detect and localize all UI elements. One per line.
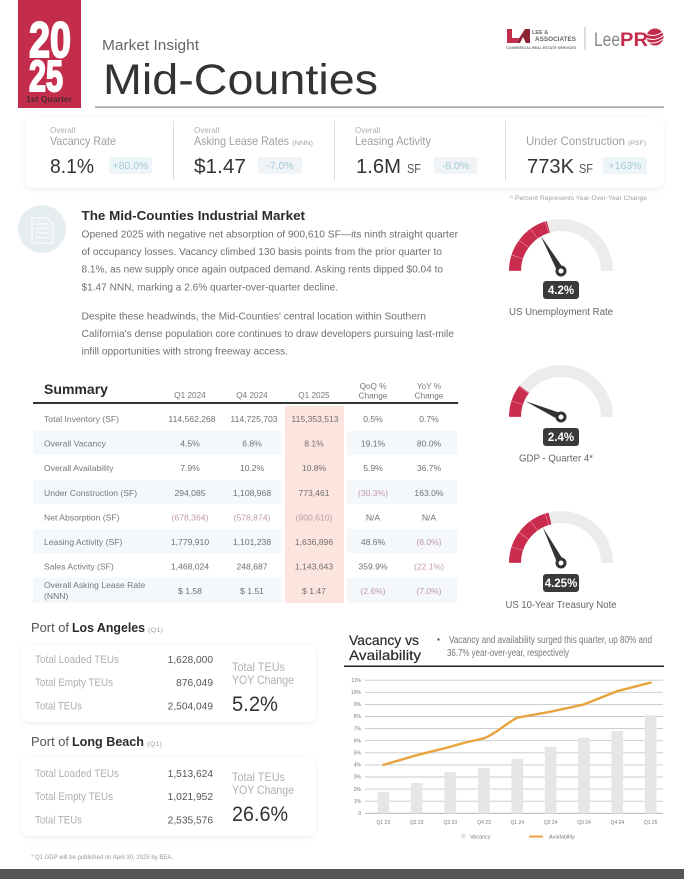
logo: Lee and Associates / LeePRO: PR [620,30,648,51]
KPI: asking lease rates [194,126,313,178]
gauge: GDP quarter 4: 2.4% [548,432,574,444]
panel: Port of Los Angeles: 876,049 [176,678,213,689]
KPI: under construction: 773K [527,156,575,178]
panel: Port of Long Beach: 26.6% [232,803,288,826]
panel: Port of Long Beach: 1,021,952 [168,792,213,803]
row: net absorption: (900,610) [296,512,333,522]
row: total inventory: 0.5% [363,414,383,424]
market narrative text: Opened 2025 with negative net absorption of 900,610 SF—its ninth straight quarter [82,229,459,240]
title block [95,37,664,108]
row: overall asking lease rate: $ 1.47 [302,586,326,596]
table heading: QoQ % [360,382,386,391]
chart: vacancy vs availability: 11% [351,678,362,684]
chart legend: Vacancy [470,834,491,840]
row: under construction: 294,085 [174,488,206,498]
logo: Lee and Associates / LeePRO: Lee [594,30,620,51]
row: sales activity [44,562,444,572]
row: leasing activity: 1,636,896 [295,537,333,547]
row: leasing activity: (8.0%) [416,537,442,547]
KPI: vacancy rate [50,126,152,178]
footer bar [0,869,684,879]
icon: document [18,205,66,253]
row: overall availability: 10.2% [240,463,265,473]
logo: Lee and Associates / LeePRO: LEE & [532,30,548,36]
row: overall vacancy: 4.5% [180,438,200,448]
panel: Port of Long Beach: Total TEUs [35,814,82,826]
table heading: Q1 2024 [174,391,206,400]
gauge: US unemployment rate: 4.2% [548,285,574,297]
KPI: asking lease rates: (NNN) [292,141,313,147]
row: overall vacancy: Overall Vacancy [44,438,107,448]
panel: Port of Long Beach: Port of [31,734,69,749]
chart: vacancy vs availability: 2% [354,787,362,793]
KPI: vacancy rate: 8.1% [50,156,94,178]
row: overall availability [44,463,442,473]
KPI: asking lease rates: Overall [194,126,220,135]
row: leasing activity: Leasing Activity (SF) [44,537,122,547]
row: total inventory: 114,562,268 [168,414,216,424]
chart: vacancy vs availability: 10% [351,690,362,696]
KPI: under construction: (PSF) [628,141,646,147]
KPI: leasing activity: SF [407,162,421,176]
row: overall asking lease rate [44,580,442,601]
panel: Port of Los Angeles: Total TEUs [35,700,82,712]
chart: vacancy vs availability: 0 [358,811,361,817]
logo: Lee and Associates / LeePRO: COMMERCIAL REAL ESTATE SERVICES [506,46,577,50]
market narrative text: Despite these headwinds, the Mid-Counties' central location within Southern [82,312,426,322]
year badge: 1st Quarter [26,95,72,104]
row: total inventory: Total Inventory (SF) [44,414,119,424]
KPI: asking lease rates: -7.0% [266,160,294,172]
KPI: under construction [526,134,647,178]
row: net absorption [44,512,436,522]
gauge: US 10-year treasury note [506,517,617,611]
panel: Port of Los Angeles: Port of [31,620,69,635]
panel: Port of Los Angeles: 5.2% [232,693,278,716]
row: overall vacancy [44,438,442,448]
row: overall vacancy: 8.1% [304,438,324,448]
chart legend: Availability [549,834,575,840]
year badge: 20 [29,12,71,68]
panel: Port of Los Angeles: YOY Change [232,673,294,687]
panel: Port of Los Angeles [22,620,316,722]
KPI: under construction: SF [579,162,593,176]
row: under construction: (30.3%) [358,488,388,498]
panel: Port of Los Angeles: Total TEUs [232,660,285,674]
chart: vacancy vs availability: 4% [354,762,362,768]
row: under construction: 1,108,968 [233,488,271,498]
row: overall availability: 10.8% [302,463,327,473]
chart: vacancy vs availability: 8% [354,714,362,720]
market narrative text: infill opportunities with strong freeway access. [82,347,288,358]
chart: vacancy vs availability: 9% [354,702,362,708]
KPI panel [25,118,664,188]
row: overall asking lease rate: Overall Asking Lease Rate [44,580,145,590]
table heading: Change [359,392,388,400]
chart: vacancy vs availability [351,678,663,840]
row: leasing activity: 48.6% [361,537,386,547]
row: net absorption: N/A [422,512,436,522]
chart heading and note [344,632,664,667]
logo: Lee and Associates / LeePRO [506,27,664,51]
gauge: US 10-year treasury note: 4.25% [545,578,577,590]
KPI: leasing activity: -8.0% [442,160,469,172]
panel: Port of Los Angeles: Los Angeles [72,620,145,635]
availability line [383,683,651,765]
chart: vacancy vs availability: Q1 23 [376,820,390,826]
title block: Mid-Counties [103,56,378,104]
chart heading and note: Availability [349,647,421,663]
row: overall availability: 36.7% [417,463,442,473]
chart: vacancy vs availability: 3% [354,774,362,780]
row: leasing activity: 1,779,910 [171,537,209,547]
row: leasing activity [44,537,442,547]
row: under construction: 163.0% [414,488,444,498]
row: overall availability: 7.9% [180,463,200,473]
panel: Port of Long Beach: Total TEUs [232,770,285,784]
summary table [33,381,458,603]
KPI: vacancy rate: Overall [50,126,76,135]
KPI: vacancy rate: +80.0% [113,160,148,172]
chart: vacancy vs availability: Q4 24 [610,820,624,826]
vacancy bars [378,715,656,813]
market narrative text: of occupancy losses. Vacancy climbed 130 basis points from the prior quarter to [82,247,442,258]
row: overall vacancy: 6.8% [242,438,262,448]
chart: vacancy vs availability: 1% [354,799,362,805]
panel: Port of Los Angeles: (Q1) [148,627,163,634]
table heading: Q4 2024 [236,391,268,400]
gauge: GDP quarter 4: GDP - Quarter 4* [519,452,593,464]
row: under construction [44,488,444,498]
panel: Port of Long Beach: 2,535,576 [168,816,213,826]
chart: vacancy vs availability: Q1 24 [510,820,524,826]
row: overall availability: 5.9% [363,463,383,473]
panel: Port of Long Beach: 1,513,624 [168,769,213,780]
year badge [18,0,81,108]
gauge: US 10-year treasury note: US 10-Year Treasury Note [506,599,617,611]
KPI: asking lease rates: $1.47 [194,156,246,178]
chart: vacancy vs availability: Q2 23 [410,820,424,826]
logo: Lee and Associates / LeePRO: ASSOCIATES [535,37,576,43]
table heading [44,381,444,400]
panel: Port of Long Beach: (Q1) [147,741,162,748]
KPI: asking lease rates: Asking Lease Rates [194,134,289,148]
market narrative text: California's dense population core continues to draw developers pursuing last-mile [82,329,454,340]
KPI: vacancy rate: Vacancy Rate [50,134,116,148]
KPI: leasing activity: Leasing Activity [355,134,431,148]
table heading: Summary [44,381,108,397]
row: net absorption: (578,874) [234,512,271,522]
row: sales activity: 248,687 [236,562,268,572]
market narrative text: 8.1%, as new supply once again outpaced demand. Asking rents dipped $0.04 to [82,265,443,276]
year badge: 25 [29,52,63,101]
row: overall vacancy: 19.1% [361,438,386,448]
row: under construction: Under Construction (SF) [44,488,137,498]
footnote: GDP: * Q1 GDP will be published on April 30, 2025 by BEA. [31,855,173,861]
market narrative text [82,208,459,358]
gauge: US unemployment rate [509,225,613,318]
KPI: leasing activity [355,126,477,178]
table heading: Change [415,392,444,400]
row: total inventory: 114,725,703 [230,414,278,424]
row: overall asking lease rate: $ 1.58 [178,586,202,596]
KPI: leasing activity: 1.6M [356,156,401,178]
gauge: US unemployment rate: US Unemployment Rate [509,306,613,318]
row: leasing activity: 1,101,238 [233,537,271,547]
row: net absorption: N/A [366,512,380,522]
market narrative text: $1.47 NNN, marking a 2.6% quarter-over-quarter decline. [82,283,338,294]
chart legend [461,834,575,840]
row: total inventory [44,414,439,424]
panel: Port of Los Angeles: Total Empty TEUs [35,677,113,689]
row: net absorption: Net Absorption (SF) [44,512,120,522]
market narrative text: The Mid-Counties Industrial Market [82,208,306,223]
chart: vacancy vs availability: 6% [354,738,362,744]
row: overall asking lease rate: (2.6%) [360,586,386,596]
chart: vacancy vs availability: Q4 23 [477,820,491,826]
chart: vacancy vs availability: Q3 24 [577,820,591,826]
row: overall vacancy: 80.0% [417,438,442,448]
row: overall asking lease rate: (7.0%) [416,586,442,596]
chart heading and note: 36.7% year-over-year, respectively [447,648,569,659]
row: sales activity: Sales Activity (SF) [44,562,114,572]
chart: vacancy vs availability: Q2 24 [544,820,558,826]
chart: vacancy vs availability: 5% [354,750,362,756]
KPI: leasing activity: Overall [355,126,381,135]
chart: vacancy vs availability: Q3 23 [443,820,457,826]
row: overall asking lease rate: $ 1.51 [240,586,264,596]
table heading: Q1 2025 [298,391,330,400]
title block: Market Insight [102,37,200,54]
row: overall availability: Overall Availability [44,463,114,473]
panel: Port of Long Beach: Total Loaded TEUs [35,768,119,780]
row: total inventory: 0.7% [419,414,439,424]
row: under construction: 773,461 [298,488,330,498]
row: net absorption: (678,364) [172,512,209,522]
panel: Port of Long Beach [22,734,316,836]
panel: Port of Long Beach: Total Empty TEUs [35,791,113,803]
row: sales activity: 1,468,024 [171,562,209,572]
row: sales activity: (22.1%) [414,562,444,572]
chart: vacancy vs availability: 7% [354,726,362,732]
panel: Port of Long Beach: Long Beach [72,734,144,749]
table heading: YoY % [417,382,441,391]
panel: Port of Long Beach: YOY Change [232,783,294,797]
row: sales activity: 1,143,643 [295,562,333,572]
chart: vacancy vs availability: Q1 25 [644,820,658,826]
panel: Port of Los Angeles: 1,628,000 [168,655,213,666]
gauge: GDP quarter 4 [515,371,607,464]
KPI: under construction: Under Construction [526,134,625,148]
panel: Port of Los Angeles: 2,504,049 [168,702,213,712]
KPI: under construction: +163% [608,160,642,172]
footnote: percent change: ^ Percent Represents Year-Over-Year Change [510,195,647,202]
row: overall asking lease rate: (NNN) [44,591,68,601]
row: total inventory: 115,353,513 [291,414,339,424]
panel: Port of Los Angeles: Total Loaded TEUs [35,654,119,666]
row: sales activity: 359.9% [358,562,388,572]
chart heading and note: Vacancy vs [349,632,419,648]
